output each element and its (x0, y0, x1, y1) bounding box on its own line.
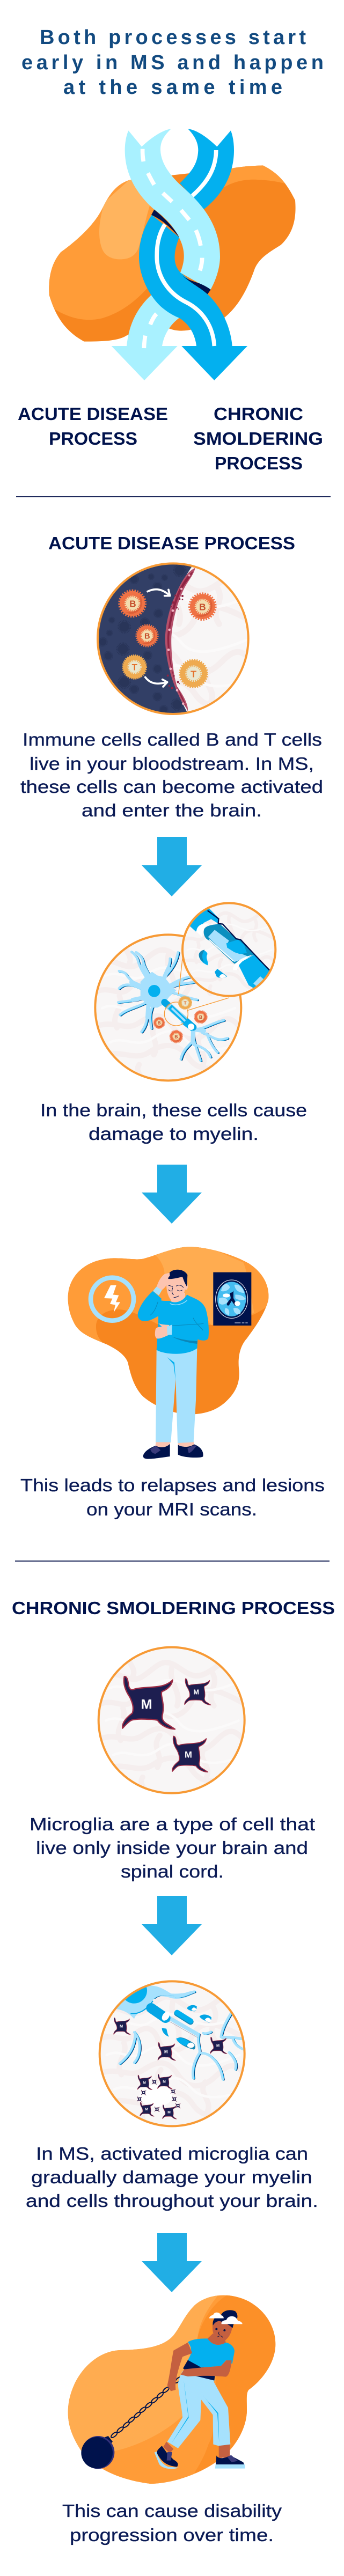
dark road upper section (180, 129, 234, 209)
body text: relapses and lesions: This leads to relapses and lesions (20, 1475, 325, 1495)
road dashes (143, 149, 202, 348)
white centre line upper (192, 150, 216, 196)
man figure (138, 1270, 209, 1459)
body text: relapses and lesions (20, 1475, 325, 1519)
microglia ring: M (143, 2081, 146, 2085)
dark road lower section (139, 215, 247, 380)
microglia: M (120, 2023, 123, 2028)
circle outline (98, 563, 248, 714)
body text: damage to myelin: damage to myelin. (89, 1124, 259, 1144)
microglia ring: M (167, 2110, 171, 2114)
arms (167, 2343, 232, 2391)
label: acute disease process: ACUTE DISEASE (18, 404, 168, 424)
body text: activated microglia (26, 2144, 318, 2211)
legs (163, 2442, 230, 2458)
body text: immune cells (20, 730, 323, 820)
damaged neuron (116, 1986, 244, 2080)
B cell (170, 1030, 182, 1043)
illustration: microglia cells (98, 1646, 246, 1794)
microglia: M (164, 2049, 168, 2054)
body text: microglia: spinal cord. (121, 1861, 224, 1881)
body text: microglia (30, 1814, 315, 1881)
T cell in brain: T (191, 668, 196, 679)
microglia large: M (141, 1697, 152, 1712)
blood vessel (165, 568, 195, 711)
microglia (210, 2037, 227, 2054)
damaged brain hole (140, 2085, 172, 2107)
label: chronic smoldering process: PROCESS (215, 453, 303, 473)
T cell: T (132, 662, 137, 672)
label: acute disease process (18, 404, 168, 448)
B cell (194, 1011, 207, 1024)
illustration: intertwined roads over orange blob (43, 129, 296, 380)
arrow: upper (148, 590, 170, 596)
neck (171, 1293, 185, 1304)
body text: immune cells: live in your bloodstream. In MS, (30, 754, 314, 774)
label: acute disease process: PROCESS (49, 429, 137, 448)
circle background (99, 564, 247, 713)
body text: microglia: Microglia are a type of cell that (30, 1814, 315, 1834)
chain (110, 2372, 187, 2439)
body text: disability progression: progression over time. (70, 2525, 274, 2545)
body text: immune cells: these cells can become activated (20, 777, 323, 797)
T cell: T (184, 1000, 187, 1005)
light road lower section (112, 295, 179, 380)
orange blob (68, 1247, 268, 1414)
neck and head (208, 2310, 237, 2345)
illustration: person pulling ball and chain (68, 2295, 276, 2484)
title: early in MS and happen (21, 51, 324, 74)
shirt (188, 2338, 235, 2367)
heading: acute disease process: ACUTE DISEASE PROCESS (48, 533, 295, 553)
B cell: B (144, 632, 150, 641)
body text: damage to myelin: In the brain, these cells cause (40, 1100, 307, 1120)
inset magnified axon (181, 902, 277, 997)
face (166, 1270, 188, 1301)
title: at the same time (63, 76, 282, 99)
orange blob (43, 159, 296, 342)
main circle (97, 936, 240, 1079)
T cell (122, 655, 147, 679)
microglia medium: M (185, 1750, 192, 1760)
B cell: B (158, 1021, 161, 1026)
label: chronic smoldering process (193, 404, 323, 473)
B cell (119, 590, 145, 617)
circle background (100, 1648, 244, 1792)
body text: damage to myelin (40, 1100, 307, 1144)
lower hand (155, 1323, 172, 1338)
body text: activated microglia: gradually damage your myelin (31, 2167, 312, 2187)
arrow down (142, 1896, 202, 1955)
raised hand (157, 1273, 170, 1290)
B cell in brain (189, 593, 216, 620)
illustration: neuron with myelin damage (94, 902, 277, 1081)
white centre line lower (157, 224, 214, 346)
microglia (158, 2043, 175, 2060)
shoes (155, 2446, 245, 2469)
arrow down (142, 1165, 202, 1224)
B cell: B (129, 599, 136, 609)
shoes (143, 1444, 203, 1459)
ankles (155, 1441, 194, 1449)
trousers (167, 2371, 230, 2448)
circle background (101, 1983, 244, 2125)
orange blob (68, 2295, 276, 2484)
microglia medium (172, 1736, 208, 1772)
illustration: B and T cells crossing into brain (97, 562, 250, 715)
heading: chronic smoldering process: CHRONIC SMOLDERING PROCESS (12, 1598, 335, 1618)
arrow down (142, 837, 202, 896)
microglia: M (216, 2043, 219, 2048)
microglia (114, 2018, 130, 2035)
icon: brain fog clouds (209, 2313, 243, 2324)
microglia small: M (193, 1689, 199, 1696)
label: chronic smoldering process: CHRONIC (214, 404, 303, 424)
body text: microglia: live only inside your brain and (36, 1838, 308, 1858)
body text: immune cells: and enter the brain. (82, 800, 262, 820)
body text: disability progression: This can cause disability (62, 2501, 282, 2521)
woman figure (155, 2310, 245, 2469)
MRI scan (213, 1272, 251, 1326)
arrow down (142, 2233, 202, 2292)
icon: lightning ring (91, 1278, 134, 1321)
light road upper section (125, 129, 220, 290)
microglia ring: M (145, 2108, 148, 2111)
body text: immune cells: Immune cells called B and T cells (23, 730, 322, 749)
B cell (136, 625, 158, 646)
B cell in brain: B (199, 601, 206, 612)
B cell (153, 1017, 165, 1028)
label: chronic smoldering process: SMOLDERING (193, 429, 323, 448)
arrow: lower (145, 677, 167, 687)
belt (183, 2360, 215, 2381)
ball (81, 2436, 114, 2469)
small zoom circle (164, 1002, 188, 1026)
body text: activated microglia: In MS, activated microglia can (36, 2144, 308, 2163)
body text: activated microglia: and cells throughout your brain. (26, 2191, 318, 2211)
body text: relapses and lesions: on your MRI scans. (86, 1499, 257, 1519)
illustration: damaged neuron with microglia (99, 1980, 246, 2128)
microglia ring: M (163, 2080, 166, 2084)
illustration: man with headache and MRI scan (68, 1247, 268, 1459)
microglia small (185, 1679, 211, 1705)
neuron (118, 952, 229, 1061)
title (21, 26, 324, 99)
T cell in brain (180, 660, 208, 688)
body text: disability progression (62, 2501, 282, 2545)
road shadows (151, 210, 211, 294)
T cell (179, 996, 192, 1010)
leaking blood droplets (167, 594, 184, 689)
trousers (156, 1348, 197, 1443)
B cell: B (174, 1034, 178, 1040)
microglia ring (137, 2074, 181, 2119)
sweater (138, 1291, 209, 1354)
microglia large (122, 1676, 175, 1729)
title: Both processes start (40, 26, 306, 49)
B cell: B (199, 1014, 202, 1020)
